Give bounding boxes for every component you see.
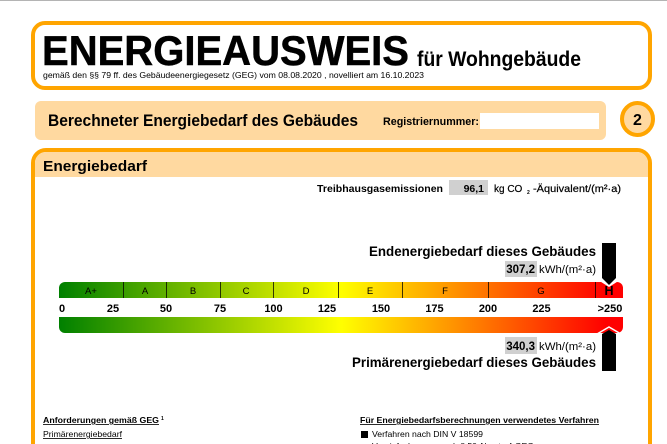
banner heading: Berechneter Energiebedarf des Gebäudes: [48, 111, 358, 130]
subtitle: für Wohngebäude: [417, 48, 581, 71]
title panel: [33, 23, 650, 88]
scale numbers: 225: [532, 303, 551, 315]
title: ENERGIEAUSWEIS: [42, 27, 409, 74]
arrow outline: primary energy marker: [597, 327, 621, 334]
scale numbers: 100: [264, 303, 283, 315]
scale numbers: 125: [318, 303, 336, 315]
class labels: A: [142, 286, 149, 297]
panel: energy demand: [33, 150, 650, 444]
page number badge: [622, 103, 653, 135]
final energy demand label: kWh/(m²·a): [539, 264, 596, 276]
primary energy demand label: [352, 337, 596, 370]
greenhouse gas emissions: -Äquivalent/(m²·a): [533, 183, 621, 195]
panel heading: Energiebedarf: [43, 158, 148, 175]
final energy demand label: 307,2: [506, 264, 535, 276]
class labels: B: [190, 286, 196, 297]
registration label: Registriernummer:: [383, 116, 479, 128]
primary energy demand label: 340,3: [506, 341, 535, 353]
page number badge: 2: [633, 112, 642, 129]
calculation method block: Verfahren nach DIN V 18599: [372, 429, 483, 439]
legal basis line: gemäß den §§ 79 ff. des Gebäudeenergiegesetz (GEG) vom 08.08.2020 , novelliert am 16.10.2023: [43, 70, 424, 80]
greenhouse gas emissions: [317, 180, 621, 196]
class labels: D: [303, 286, 310, 297]
class labels: E: [367, 286, 373, 297]
requirements block: 1: [161, 416, 164, 422]
greenhouse gas emissions: 96,1: [464, 183, 484, 195]
greenhouse gas emissions: Treibhausgasemissionen: [317, 184, 443, 195]
panel header band: [35, 152, 648, 177]
scale numbers: 200: [479, 303, 497, 315]
arrow outline: final energy marker: [595, 279, 623, 287]
primary energy demand label: Primärenergiebedarf dieses Gebäudes: [352, 354, 596, 370]
scale numbers: [59, 303, 622, 315]
calculation method block: [360, 415, 599, 444]
requirements block: Primärenergiebedarf: [43, 429, 123, 439]
requirements block: Anforderungen gemäß GEG: [43, 415, 159, 425]
registration number field: [480, 113, 599, 129]
class labels: H: [604, 284, 614, 298]
scale numbers: 75: [214, 303, 226, 315]
scale numbers: 25: [107, 303, 119, 315]
class labels: F: [442, 286, 448, 297]
arrow: primary energy marker: [602, 330, 616, 371]
scale numbers: >250: [598, 303, 622, 315]
scale numbers: 150: [372, 303, 390, 315]
calculation method block: Für Energiebedarfsberechnungen verwendetes Verfahren: [360, 415, 599, 425]
final energy demand label: Endenergiebedarf dieses Gebäudes: [369, 243, 596, 259]
class dividers: [124, 282, 596, 298]
class labels: A+: [85, 286, 97, 297]
primary energy demand label: kWh/(m²·a): [539, 341, 596, 353]
class labels: C: [243, 286, 250, 297]
arrow: final energy marker: [602, 243, 616, 285]
requirements block: [43, 415, 164, 439]
upper scale bar: [59, 282, 623, 298]
scale numbers: 0: [59, 303, 65, 315]
final energy demand label: [369, 243, 596, 277]
greenhouse gas emissions: kg CO: [494, 184, 523, 195]
scale numbers: 175: [425, 303, 444, 315]
greenhouse gas emissions: 2: [527, 190, 530, 196]
scale numbers: 50: [160, 303, 172, 315]
class labels: [85, 284, 614, 298]
banner: calculated energy demand: [35, 101, 606, 140]
class labels: G: [537, 286, 545, 297]
lower scale bar: [59, 317, 623, 333]
